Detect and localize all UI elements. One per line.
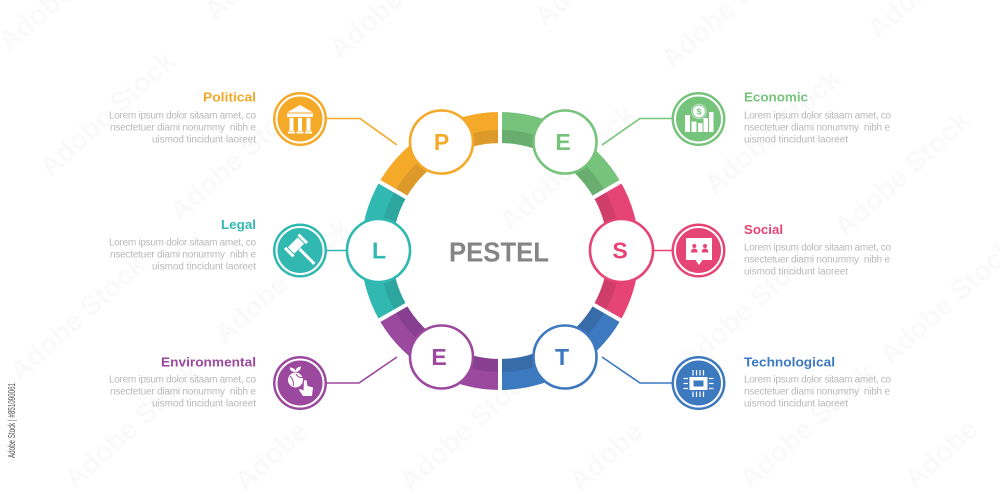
ring segment: political	[380, 112, 500, 197]
icon: political building	[273, 92, 327, 146]
ring segment: technological	[500, 305, 620, 390]
text block: legal: uismod tincidunt laoreet	[152, 262, 256, 272]
text block: social	[744, 222, 891, 278]
text block: environmental	[109, 354, 256, 410]
text block: economic: nsectetuer diami nonummy nibh e	[744, 122, 890, 134]
text: Adobe	[898, 413, 984, 494]
ring chart: six PESTEL segments	[361, 105, 639, 397]
text block: legal: Legal	[221, 217, 256, 232]
connector: economic	[602, 118, 674, 145]
connector: social	[652, 250, 674, 252]
connector: legal	[325, 250, 348, 252]
letter badge: P	[410, 110, 473, 174]
letter badge: L	[347, 219, 410, 282]
text block: legal: nsectetuer diami nonummy nibh e	[110, 250, 256, 260]
icon: social speech bubble	[672, 224, 726, 278]
letter badge: E economic	[534, 110, 596, 174]
ring segment: economic	[500, 112, 620, 197]
letter badge: S	[590, 219, 653, 282]
ring segment: social	[594, 182, 639, 320]
text block: technological	[744, 354, 891, 410]
text block: legal: Lorem ipsum dolor sitaam amet, co	[109, 238, 256, 248]
text: Adobe Stock	[828, 105, 977, 242]
text block: political: uismod tincidunt laoreet	[152, 134, 256, 146]
letter badge: T: T	[555, 344, 569, 370]
letter badge: L: L	[372, 238, 386, 264]
text block: political	[109, 90, 256, 146]
text block: social: Lorem ipsum dolor sitaam amet, co	[744, 242, 891, 254]
text: Adobe Stock	[33, 45, 182, 182]
text block: economic: Lorem ipsum dolor sitaam amet, co	[744, 110, 891, 122]
text: Adobe Stock	[163, 89, 312, 226]
text block: environmental: Lorem ipsum dolor sitaam amet, co	[109, 374, 256, 386]
text: Adobe Stock	[208, 212, 357, 349]
letter badge: S: S	[612, 238, 628, 264]
letter badge: T	[534, 326, 596, 388]
credit: vertical stock id: Adobe Stock | #851090061	[6, 383, 18, 458]
text block: environmental: Environmental	[161, 354, 256, 370]
text: Adobe Stock	[493, 99, 642, 236]
ring segment: legal	[361, 182, 406, 320]
letter badge: P: P	[434, 129, 449, 155]
text: Adobe Stock	[393, 359, 542, 494]
text block: legal	[109, 217, 256, 272]
text block: environmental: uismod tincidunt laoreet	[152, 398, 256, 410]
connector: environmental	[325, 357, 397, 383]
letter badge: E economic: E	[555, 129, 571, 155]
text: Adobe Stock	[698, 63, 847, 200]
text: Adobe Stock	[673, 239, 822, 376]
text block: social: Social	[744, 222, 783, 237]
icon: environmental plant and hand	[273, 356, 327, 410]
ring segment: environmental	[380, 305, 500, 390]
text block: technological: Technological	[744, 354, 835, 370]
connector: technological	[602, 357, 674, 383]
icon: technological microchip	[672, 356, 726, 410]
text block: political: Lorem ipsum dolor sitaam amet, co	[109, 110, 256, 122]
center title: PESTEL	[449, 236, 549, 268]
connector: political	[325, 118, 397, 145]
text block: technological: Lorem ipsum dolor sitaam amet, co	[744, 374, 891, 386]
text block: social: uismod tincidunt laoreet	[744, 266, 848, 278]
text block: social: nsectetuer diami nonummy nibh e	[744, 254, 890, 266]
text block: environmental: nsectetuer diami nonummy nibh e	[110, 386, 256, 398]
icon: legal gavel	[273, 224, 327, 278]
icon: economic chart and coin	[672, 92, 726, 146]
icon: economic chart and coin: $	[697, 106, 702, 116]
letter badge: E environmental	[410, 326, 473, 388]
text block: economic: uismod tincidunt laoreet	[744, 134, 848, 146]
text block: technological: uismod tincidunt laoreet	[744, 398, 848, 410]
text block: political: nsectetuer diami nonummy nibh e	[110, 122, 256, 134]
text: Adobe Stock	[733, 357, 882, 494]
text: Adobe Stock	[58, 357, 207, 494]
letter badge: E environmental: E	[431, 344, 447, 370]
text block: economic	[744, 90, 891, 146]
text block: economic: Economic	[744, 90, 808, 104]
text block: technological: nsectetuer diami nonummy nibh e	[744, 386, 890, 398]
text: Adobe Stock	[3, 249, 152, 386]
text block: political: Political	[203, 90, 256, 104]
